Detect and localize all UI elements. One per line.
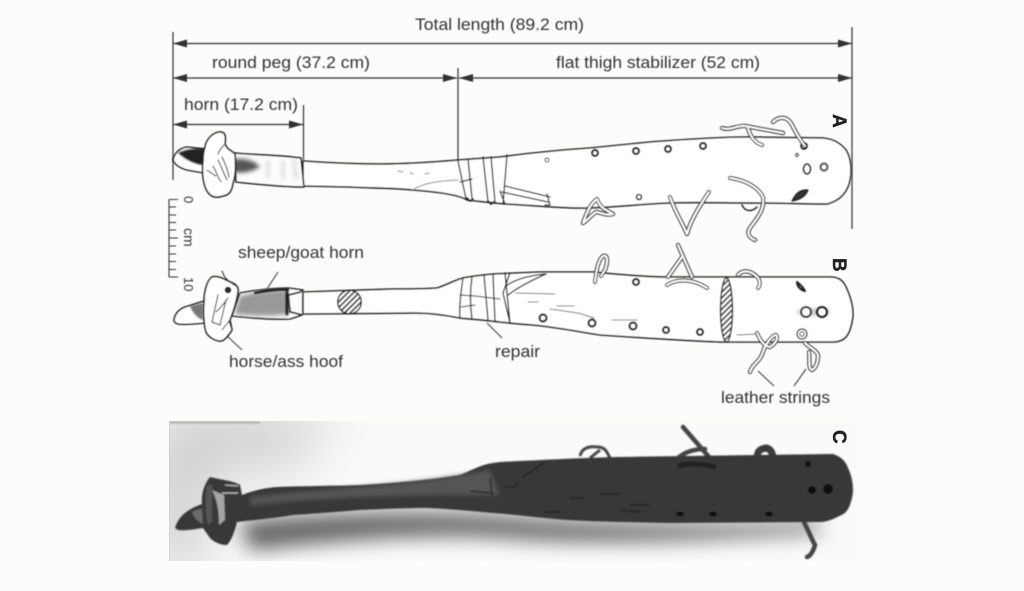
sheep horn sheath (235, 153, 304, 187)
lacing holes (540, 279, 703, 335)
surface marks (516, 293, 757, 335)
annotation labels and leaders (227, 244, 830, 407)
arrow: flat thigh stabilizer (459, 74, 852, 82)
repair wrapping (458, 155, 507, 204)
hoof flange (204, 277, 238, 341)
photo shading (169, 421, 831, 561)
photo background (169, 421, 857, 561)
strap on surface (678, 464, 716, 467)
label: round peg: round peg (37.2 cm) (212, 54, 370, 72)
scale labels: 10 (181, 277, 196, 291)
scale bar (169, 196, 197, 291)
panel A: club drawing (173, 118, 851, 240)
hatched section: round (338, 290, 361, 314)
repair wrapping (460, 273, 546, 323)
scale labels (181, 196, 197, 291)
club in photo (175, 427, 853, 557)
label: flat thigh stabilizer: flat thigh stabilizer (52 cm) (556, 54, 760, 72)
shaft body (175, 454, 853, 545)
letter B: B (828, 258, 849, 272)
arrow: total length (173, 40, 852, 48)
scale labels: cm (181, 228, 197, 247)
string tails (678, 427, 815, 557)
handle highlight (250, 470, 500, 506)
label: leather strings: leather strings (721, 389, 830, 407)
label: sheep/goat horn: sheep/goat horn (238, 244, 364, 262)
leader lines (227, 272, 806, 386)
hatched section: oval (720, 278, 732, 342)
horn tip (173, 147, 206, 173)
extension lines (173, 27, 852, 229)
flange marks (222, 485, 238, 493)
leather strings (595, 245, 818, 372)
hoof flange (202, 132, 236, 197)
label: total length: Total length (89.2 cm) (415, 16, 584, 34)
lacing holes (592, 143, 807, 156)
panel: dimension lines (173, 27, 852, 229)
club outline (303, 137, 851, 208)
surface marks near handle (398, 171, 458, 190)
panel C: photograph of club (169, 421, 854, 561)
letter A: A (828, 114, 849, 128)
arrow: round peg (173, 74, 457, 82)
cracks (470, 462, 545, 495)
arrow: horn (173, 120, 303, 128)
flange highlight (212, 490, 225, 525)
scale labels: 0 (181, 196, 196, 203)
club outline (303, 272, 853, 342)
infographic figure (168, 17, 855, 561)
label: horse/ass hoof: horse/ass hoof (229, 353, 343, 371)
holes (676, 461, 833, 516)
letter C: C (828, 430, 849, 444)
sheep horn sheath (232, 288, 303, 319)
label: repair: repair (495, 343, 541, 361)
label: horn: horn (17.2 cm) (184, 96, 298, 114)
leather strings (583, 118, 805, 240)
dimension labels (184, 16, 760, 114)
panel B: club drawing (174, 245, 853, 372)
horn tip (174, 301, 204, 324)
